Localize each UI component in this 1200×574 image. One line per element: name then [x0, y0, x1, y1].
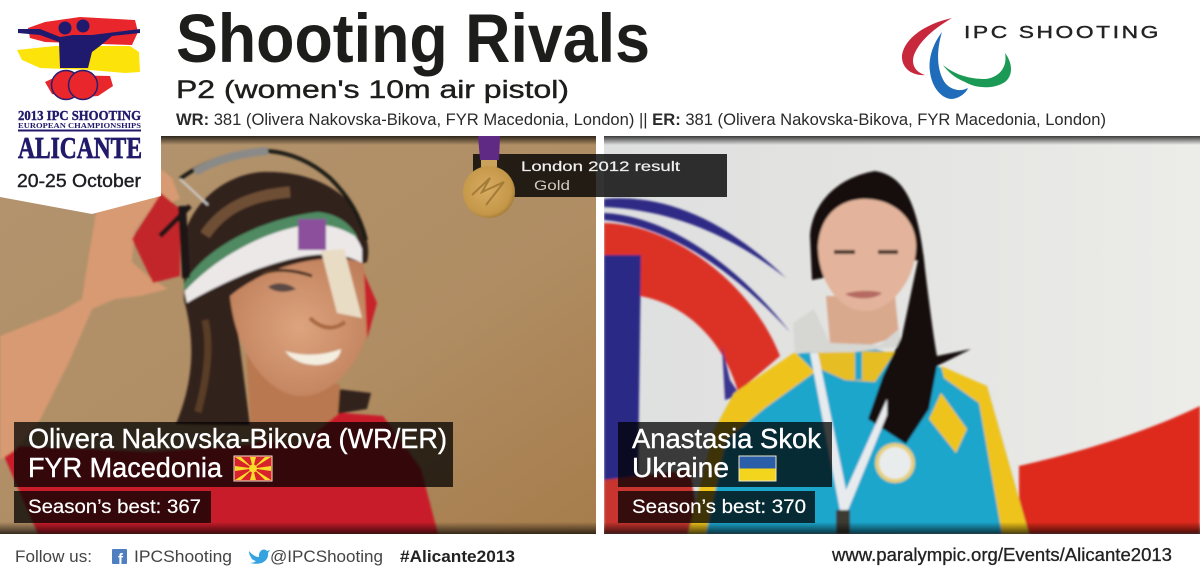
- gold medal: [463, 166, 515, 218]
- shirt: [4, 412, 438, 534]
- name box: [618, 422, 832, 487]
- twitter handle: @IPCShooting: [270, 547, 383, 566]
- logo: lower red stripe: [45, 75, 113, 98]
- hashtag: #Alicante2013: [400, 547, 515, 566]
- left athlete caption: [14, 422, 453, 523]
- name box: [14, 422, 453, 487]
- callout result: Gold: [534, 178, 570, 193]
- callout box: [473, 154, 727, 197]
- logo: red flag stripe: [28, 17, 138, 45]
- panel: left athlete photo: [0, 136, 596, 534]
- callout heading: London 2012 result: [521, 159, 680, 174]
- logo title line: 2013 IPC SHOOTING: [18, 109, 141, 124]
- icon: facebook: f: [118, 551, 124, 568]
- wall logo: blue arcs: [604, 198, 786, 278]
- jacket yellow right: [941, 366, 1029, 534]
- jacket yellow left: [688, 352, 815, 534]
- left earmuff: [132, 193, 180, 283]
- jacket: [688, 345, 1029, 534]
- eye: [268, 283, 296, 292]
- smile: [285, 349, 341, 365]
- logo: yellow flag stripe: [17, 46, 140, 73]
- right earmuff: [364, 273, 377, 339]
- result callout: [463, 136, 727, 218]
- panel: right athlete photo: [604, 136, 1200, 534]
- jacket yoke: [814, 350, 895, 382]
- website: www.paralympic.org/Events/Alicante2013: [831, 545, 1172, 565]
- right athlete caption: [618, 422, 832, 523]
- ponytail and hair: [810, 171, 971, 444]
- wall logo: navy block: [604, 255, 641, 490]
- face: [230, 258, 369, 396]
- patch: [875, 443, 915, 483]
- red wall swoosh: [1019, 406, 1200, 534]
- flag: Macedonia: [234, 456, 272, 481]
- agitos: green: [943, 53, 1011, 87]
- nose shadow: [310, 318, 345, 328]
- medal: [836, 510, 850, 534]
- logo: target circles: [52, 70, 98, 100]
- hair: [176, 172, 368, 425]
- headband: [184, 216, 362, 303]
- face: [818, 199, 916, 311]
- country: FYR Macedonia: [28, 452, 222, 483]
- event dates: 20-25 October: [17, 171, 141, 191]
- logo wordmark: IPC SHOOTING: [964, 22, 1161, 42]
- eyes: [834, 250, 898, 254]
- icon: facebook: [112, 549, 127, 568]
- season best box: [618, 491, 815, 523]
- event logo: [17, 17, 142, 191]
- title: Shooting Rivals: [176, 0, 650, 77]
- medal ribbon: [478, 136, 500, 160]
- lips: [845, 291, 882, 298]
- season best box: [14, 491, 211, 523]
- athlete name: Olivera Nakovska-Bikova (WR/ER): [28, 423, 447, 454]
- medal ribbon: [810, 353, 887, 510]
- agitos: red: [902, 18, 952, 75]
- follow us: Follow us:: [15, 547, 92, 566]
- season best: Season’s best: 367: [28, 497, 201, 518]
- hood: [793, 309, 902, 353]
- logo place name: ALICANTE: [18, 130, 142, 165]
- neck: [826, 296, 899, 345]
- facebook handle: IPCShooting: [134, 547, 232, 566]
- IPC Shooting logo: [902, 18, 1161, 99]
- agitos: blue: [930, 32, 968, 99]
- headset band: [180, 151, 366, 240]
- icon: twitter: [249, 550, 270, 564]
- subtitle: P2 (women's 10m air pistol): [176, 76, 569, 104]
- arm and hand: [0, 169, 180, 460]
- wall logo: red ring: [604, 223, 780, 392]
- neck: [246, 352, 340, 445]
- country: Ukraine: [632, 452, 729, 483]
- label patch: [298, 219, 326, 250]
- record line: WR: 381 (Olivera Nakovska-Bikova, FYR Macedonia, London) || ER: 381 (Olivera Nakovska-Bikova, FYR Macedonia, London): [176, 111, 1106, 129]
- white event tab: [0, 130, 161, 214]
- flag: Ukraine: [738, 456, 776, 482]
- lower hair: [337, 389, 371, 414]
- paper strip: [321, 249, 362, 318]
- footer: [0, 534, 1200, 574]
- athlete name: Anastasia Skok: [632, 423, 822, 454]
- logo: shooters: [18, 20, 140, 68]
- wall logo: lower red: [604, 470, 700, 534]
- season best: Season’s best: 370: [632, 497, 806, 518]
- logo subtitle line: EUROPEAN CHAMPIONSHIPS: [18, 121, 141, 130]
